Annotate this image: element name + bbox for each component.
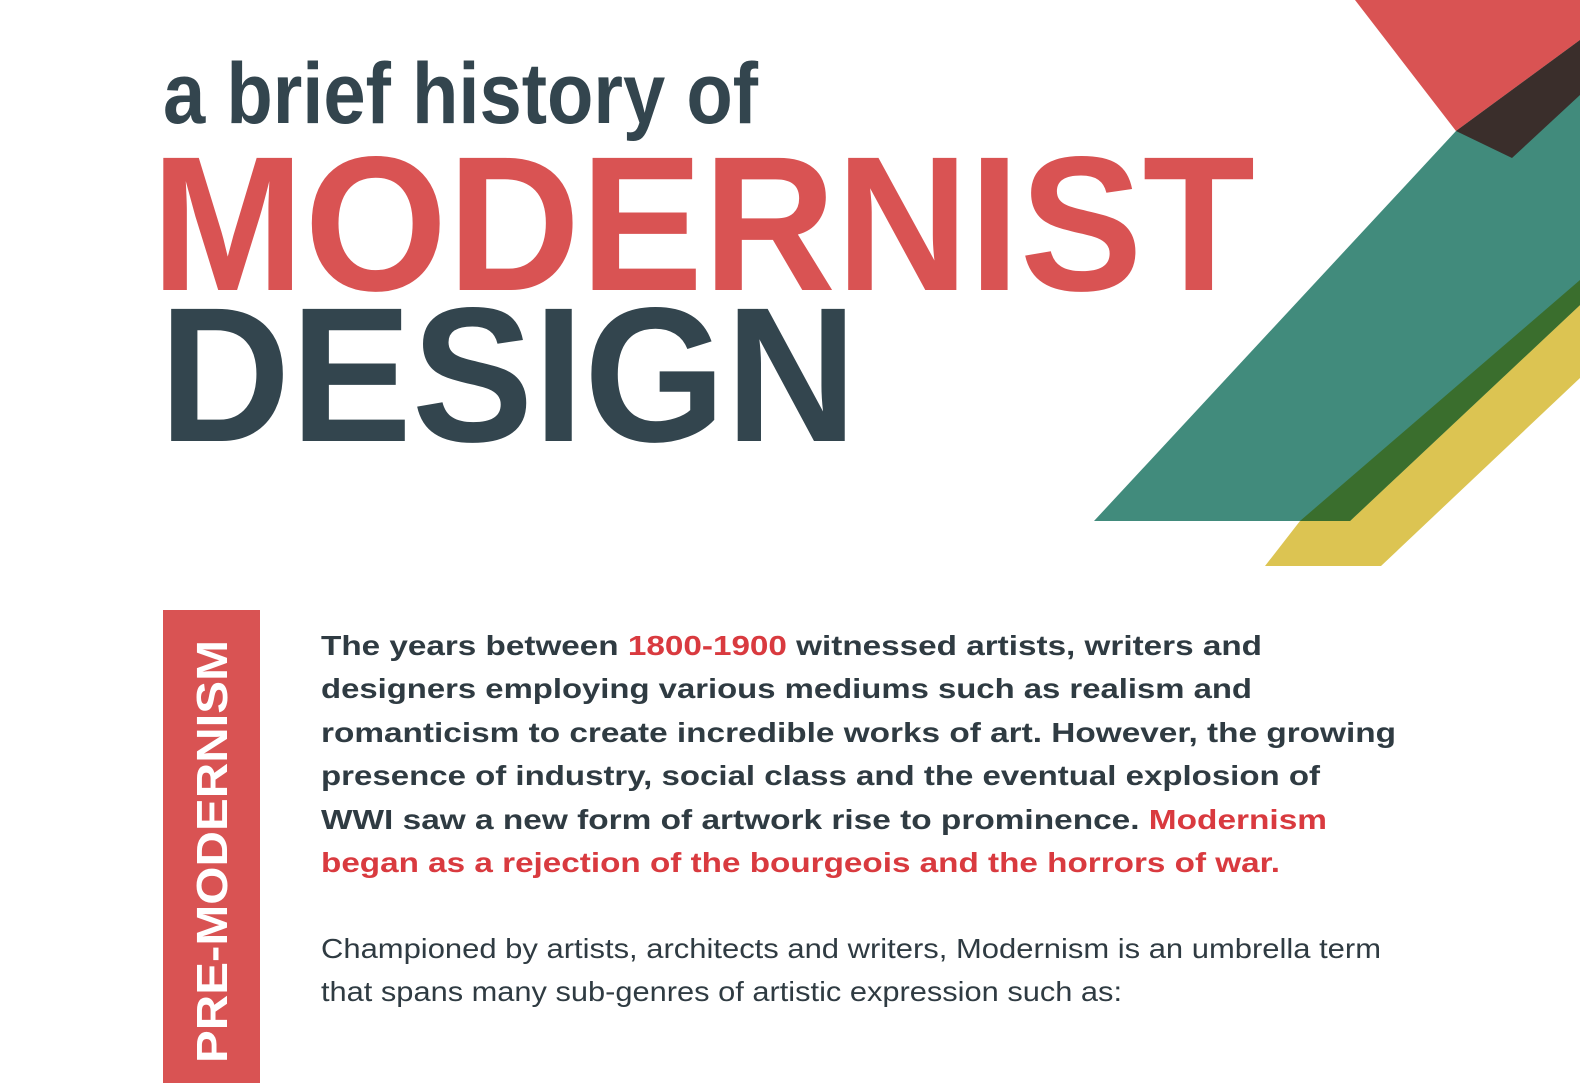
- text block: second paragraph: that spans many sub-genres of artistic expression such as:: [321, 976, 1122, 1007]
- decorative geometric shapes: [1094, 0, 1580, 566]
- text block: intro paragraph: began as a rejection of the bourgeois and the horrors of war.: [321, 847, 1280, 878]
- heading: DESIGN: DESIGN: [159, 267, 857, 482]
- text block: intro paragraph: WWI saw a new form of artwork rise to prominence. Modernism: [321, 804, 1327, 835]
- text block: intro paragraph: The years between 1800-1900 witnessed artists, writers and: [321, 630, 1262, 661]
- text block: intro paragraph: romanticism to create incredible works of art. However, the growing: [321, 717, 1396, 748]
- text block: intro paragraph: presence of industry, social class and the eventual explosion of: [321, 760, 1321, 791]
- text block: second paragraph: [321, 933, 1381, 1007]
- text block: intro paragraph: designers employing various mediums such as realism and: [321, 673, 1252, 704]
- title: [151, 46, 1255, 482]
- shape: red triangle: [1355, 0, 1580, 131]
- text block: intro paragraph: [321, 630, 1396, 878]
- shape: green overlap: [1300, 280, 1580, 521]
- shape: teal band: [1094, 40, 1580, 521]
- heading: MODERNIST: MODERNIST: [151, 116, 1255, 331]
- shape: dark band: [1456, 40, 1580, 158]
- sidebar: PRE-MODERNISM: [163, 610, 260, 1083]
- subtitle: a brief history of: a brief history of: [163, 46, 758, 142]
- shape: yellow band: [1265, 280, 1580, 566]
- text block: second paragraph: Championed by artists, architects and writers, Modernism is an umbrella term: [321, 933, 1381, 964]
- sidebar: PRE-MODERNISM: PRE-MODERNISM: [188, 640, 237, 1063]
